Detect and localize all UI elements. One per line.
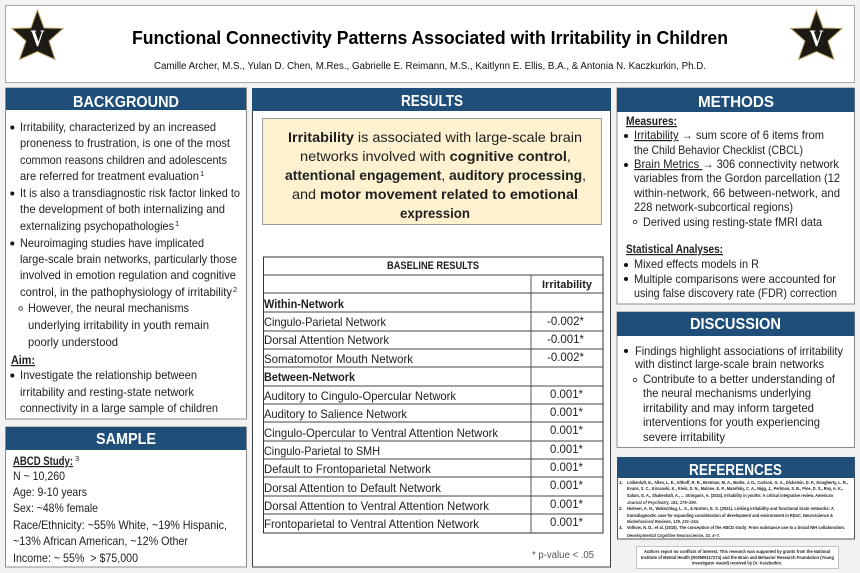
methods text: Irritability → sum score of 6 items from xyxy=(634,128,824,142)
panel: discussion xyxy=(617,312,854,448)
discussion text: irritability and may inform targeted xyxy=(643,401,814,415)
background text: However, the neural mechanisms xyxy=(28,301,189,315)
table: baseline results: 0.001* xyxy=(550,405,583,419)
background text: proneness to frustration, is one of the most xyxy=(20,136,231,150)
table: baseline results: Auditory to Cingulo-Opercular Network xyxy=(264,389,457,403)
sample text: ABCD Study: xyxy=(13,454,73,468)
table: baseline results: 0.001* xyxy=(550,515,583,529)
background text: Investigate the relationship between xyxy=(20,368,197,382)
background text: externalizing psychopathologies xyxy=(20,219,174,233)
discussion text: interventions for youth experiencing xyxy=(643,415,820,429)
background text: connectivity in a large sample of children xyxy=(20,401,218,415)
background text: Neuroimaging studies have implicated xyxy=(20,236,204,250)
heading: methods: METHODS xyxy=(698,94,774,111)
methods text: variables from the Gordon parcellation (12 xyxy=(634,171,840,185)
icon: left Vanderbilt star xyxy=(12,10,63,60)
methods text: Statistical Analyses: xyxy=(626,242,723,256)
methods text: Measures: xyxy=(626,114,677,128)
panel: references xyxy=(617,457,854,539)
background text: 1 xyxy=(200,169,204,178)
background text: underlying irritability in youth remain xyxy=(28,318,209,332)
methods text xyxy=(624,114,840,300)
reference list: 2. xyxy=(619,506,623,511)
discussion text xyxy=(624,344,843,444)
table: baseline results: Dorsal Attention Network xyxy=(264,333,390,347)
heading: background: BACKGROUND xyxy=(73,94,179,111)
sample text: 3 xyxy=(75,454,79,463)
authors: Camille Archer, M.S., Yulan D. Chen, M.Res., Gabrielle E. Reimann, M.S., Kaitlynn E. Ellis, B.A., & Antonia N. Kaczkurkin, Ph.D. xyxy=(154,61,706,72)
heading: sample: SAMPLE xyxy=(96,431,156,448)
reference list: transdiagnostic case for expanding consideration of development and environment in RDoC. Neuroscience & xyxy=(627,513,834,518)
funding statement xyxy=(636,546,838,568)
methods text: Derived using resting-state fMRI data xyxy=(643,215,822,229)
funding statement: Authors report no conflicts of interest. This research was supported by grants from the National xyxy=(644,549,830,554)
sample text: ~13% African American, ~12% Other xyxy=(13,534,188,548)
callout: key finding: networks involved with cognitive control , xyxy=(300,149,571,164)
table: baseline results: Somatomotor Mouth Network xyxy=(264,352,414,366)
callout: key finding: attentional engagement, auditory processing, xyxy=(285,168,586,183)
reference list: Developmental Cognitive Neuroscience, 32, 4–7. xyxy=(627,533,720,538)
background text: Irritability, characterized by an increased xyxy=(20,120,216,134)
table: baseline results: -0.002* xyxy=(547,314,584,328)
icon: right Vanderbilt star: V xyxy=(810,26,824,51)
table: baseline results: 0.001* xyxy=(550,478,583,492)
table: baseline results: 0.001* xyxy=(550,497,583,511)
table: baseline results: Default to Frontoparietal Network xyxy=(264,462,432,476)
discussion text: with distinct large-scale brain networks xyxy=(634,357,824,371)
background text xyxy=(10,120,240,415)
methods text: the Child Behavior Checklist (CBCL) xyxy=(634,143,803,157)
table: baseline results: Between-Network xyxy=(264,370,355,384)
methods text: 228 network-subcortical regions) xyxy=(634,200,793,214)
reference list xyxy=(619,480,848,538)
table: baseline results: 0.001* xyxy=(550,387,583,401)
reference list: 1. xyxy=(619,480,623,485)
sample text: Sex: ~48% female xyxy=(13,501,98,515)
table: baseline results: -0.002* xyxy=(547,350,584,364)
funding statement: Investigator Award) received by Dr. Kaczkurkin. xyxy=(692,560,782,566)
background text: irritability and resting-state network xyxy=(20,385,195,399)
icon: left Vanderbilt star: V xyxy=(30,26,45,51)
background text: It is also a transdiagnostic risk factor linked to xyxy=(20,186,240,200)
table: baseline results: Cingulo-Parietal Network xyxy=(264,315,387,329)
table: baseline results: Cingulo-Opercular to Ventral Attention Network xyxy=(264,426,499,440)
callout: key finding xyxy=(262,118,602,224)
callout: key finding: and motor movement related to emotional xyxy=(292,187,578,202)
background text: 2 xyxy=(233,285,237,294)
sample text: Age: 9-10 years xyxy=(13,485,87,499)
title: Functional Connectivity Patterns Associated with Irritability in Children xyxy=(132,28,728,48)
methods text: within-network, 66 between-network, and xyxy=(633,186,840,200)
background text: large-scale brain networks, particularly those xyxy=(20,252,237,266)
reference list: Nielsen, A. N., Wakschlag, L. S., & Norton, E. S. (2021). Linking irritability and functional brain networks: A xyxy=(627,506,835,511)
panel: methods xyxy=(617,88,854,304)
methods text: Brain Metrics → 306 connectivity network xyxy=(634,157,840,171)
panel: background xyxy=(6,88,246,419)
table: baseline results: Auditory to Salience Network xyxy=(264,407,408,421)
sample text: N ~ 10,260 xyxy=(13,469,65,483)
icon: right Vanderbilt star xyxy=(791,10,842,60)
discussion text: the neural mechanisms underlying xyxy=(643,386,811,400)
table: baseline results: Dorsal Attention to Ventral Attention Network xyxy=(264,499,490,513)
callout: key finding: expression xyxy=(400,206,470,221)
discussion text: Contribute to a better understanding of xyxy=(643,372,836,386)
methods text: Multiple comparisons were accounted for xyxy=(634,272,836,286)
header banner xyxy=(6,6,854,82)
heading: results: RESULTS xyxy=(401,93,463,110)
background text: Aim: xyxy=(11,353,35,367)
sample text: Race/Ethnicity: ~55% White, ~19% Hispanic, xyxy=(13,518,227,532)
methods text: Mixed effects models in R xyxy=(634,257,759,271)
background text: 1 xyxy=(175,219,179,228)
heading: references: REFERENCES xyxy=(689,462,782,479)
callout: key finding: Irritability is associated with large-scale brain xyxy=(288,130,582,145)
funding statement: Institute of Mental Health (R00MH117274) and the Brain and Behavior Research Foundation (Young xyxy=(641,555,834,560)
background text: control, in the pathophysiology of irritability xyxy=(20,285,232,299)
sample text: Income: ~ 55% > $75,000 xyxy=(13,551,138,565)
table: baseline results xyxy=(264,257,603,533)
table: baseline results: 0.001* xyxy=(550,423,583,437)
table note: * p-value < .05 xyxy=(532,550,594,561)
panel: results xyxy=(252,88,611,567)
background text: involved in emotion regulation and cognitive xyxy=(20,268,236,282)
discussion text: Findings highlight associations of irritability xyxy=(635,344,843,358)
table: baseline results: BASELINE RESULTS xyxy=(387,260,479,272)
table: baseline results: -0.001* xyxy=(547,332,584,346)
heading: discussion: DISCUSSION xyxy=(690,316,781,333)
table: baseline results: Within-Network xyxy=(264,297,344,311)
reference list: Biobehavioral Reviews, 129, 231–244. xyxy=(627,519,699,524)
background text: the development of both internalizing and xyxy=(20,202,225,216)
background text: poorly understood xyxy=(28,335,118,349)
table: baseline results: Irritability xyxy=(542,279,592,291)
discussion text: severe irritability xyxy=(643,430,725,444)
table: baseline results: Frontoparietal to Ventral Attention Network xyxy=(264,517,480,531)
background text: are referred for treatment evaluation xyxy=(20,169,199,183)
methods text: using false discovery rate (FDR) correction xyxy=(634,286,837,300)
reference list: 3. xyxy=(619,525,623,530)
table: baseline results: Cingulo-Parietal to SMH xyxy=(264,444,380,458)
sample text xyxy=(13,454,227,565)
table: baseline results: 0.001* xyxy=(550,442,583,456)
panel: sample xyxy=(6,427,246,567)
table: baseline results: 0.001* xyxy=(550,460,583,474)
table: baseline results: Dorsal Attention to Default Network xyxy=(264,481,442,495)
reference list: Journal of Psychiatry, 181, 275–290. xyxy=(627,500,697,505)
background text: common reasons children and adolescents xyxy=(20,153,227,167)
